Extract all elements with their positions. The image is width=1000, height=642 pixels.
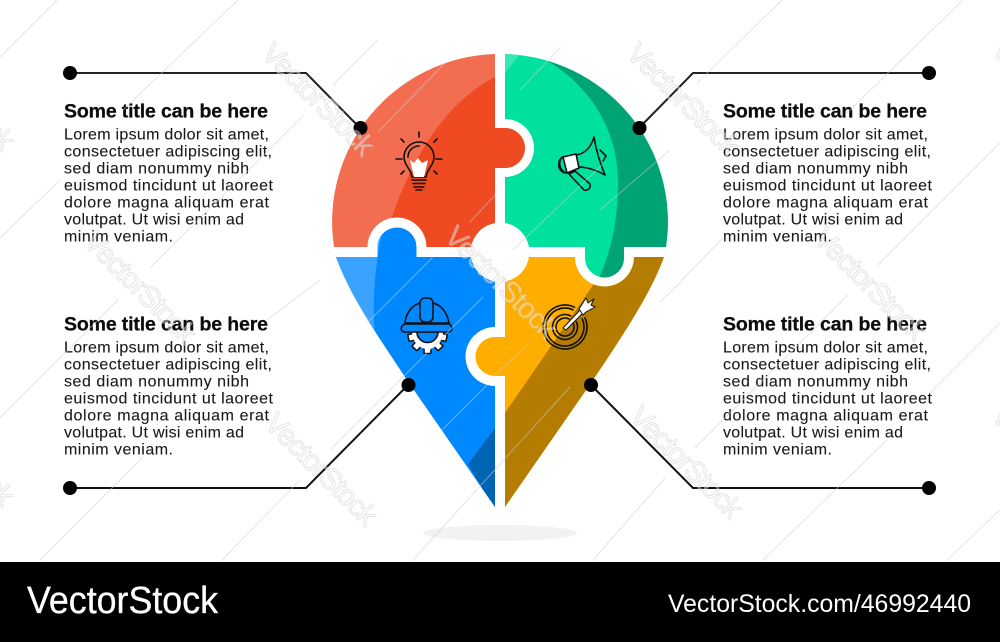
footer logo text: VectorStock: [27, 580, 219, 622]
footer bar: [0, 562, 1000, 642]
text block: bottom right: Lorem ipsum dolor sit amet,: [723, 340, 928, 356]
text block: top right: Some title can be here: [723, 100, 927, 122]
icon: helmet with gear: [401, 298, 452, 354]
text block: bottom right: volutpat. Ut wisi enim ad: [723, 424, 903, 442]
text block: bottom left: Some title can be here: [64, 314, 268, 336]
watermark overlay: VectorStock: [258, 407, 384, 533]
connector: top right: [632, 66, 936, 135]
puzzle pin: [320, 45, 680, 512]
pin shadow: [423, 525, 577, 541]
text block: top left: sed diam nonummy nibh: [64, 160, 249, 178]
text block: bottom right: sed diam nonummy nibh: [723, 374, 908, 390]
text block: bottom left: dolore magna aliquam erat: [64, 408, 270, 424]
text block: bottom left: [64, 314, 274, 458]
text block: top right: dolore magna aliquam erat: [723, 194, 929, 212]
connector: bottom left: [63, 378, 416, 495]
text block: bottom right: [723, 314, 933, 458]
text block: top right: sed diam nonummy nibh: [723, 160, 908, 178]
text block: bottom right: consectetuer adipiscing elit,: [723, 356, 931, 374]
puzzle piece: blue: [336, 228, 495, 507]
text block: top left: minim veniam.: [64, 228, 173, 246]
text block: bottom left: minim veniam.: [64, 442, 173, 458]
text block: bottom left: consectetuer adipiscing elit,: [64, 356, 272, 374]
text block: top left: volutpat. Ut wisi enim ad: [64, 212, 244, 228]
text block: bottom right: dolore magna aliquam erat: [723, 408, 929, 424]
text block: top right: consectetuer adipiscing elit,: [723, 144, 931, 160]
icon: megaphone: [559, 137, 606, 190]
puzzle piece: red: [332, 54, 525, 247]
text block: top left: euismod tincidunt ut laoreet: [64, 178, 274, 194]
watermark overlay: VectorStock: [807, 222, 933, 348]
watermark overlay: VectorStock: [620, 37, 746, 163]
text block: bottom left: Lorem ipsum dolor sit amet,: [64, 340, 269, 356]
text block: top right: Lorem ipsum dolor sit amet,: [723, 126, 928, 144]
text block: top left: consectetuer adipiscing elit,: [64, 144, 272, 160]
text block: top left: Some title can be here: [64, 100, 268, 122]
text block: top right: euismod tincidunt ut laoreet: [723, 178, 933, 194]
watermark overlay: VectorStock: [623, 400, 749, 526]
icon: target with arrow: [536, 298, 595, 356]
text block: bottom left: euismod tincidunt ut laoreet: [64, 390, 274, 408]
text block: bottom left: sed diam nonummy nibh: [64, 374, 249, 390]
puzzle piece: green: [505, 54, 668, 278]
text block: top left: Lorem ipsum dolor sit amet,: [64, 126, 269, 144]
watermark overlay: VectorStock: [438, 220, 564, 346]
text block: bottom right: minim veniam.: [723, 442, 832, 458]
text block: bottom left: volutpat. Ut wisi enim ad: [64, 424, 244, 442]
icon: light bulb: [396, 132, 442, 190]
footer image id: VectorStock.com/46992440: [668, 590, 971, 618]
text block: top right: volutpat. Ut wisi enim ad: [723, 212, 903, 228]
puzzle piece: yellow: [470, 250, 670, 510]
text block: bottom right: Some title can be here: [723, 314, 927, 336]
watermark overlay: VectorStock: [255, 37, 381, 163]
watermark overlay: VectorStock: [77, 225, 203, 351]
text block: top left: dolore magna aliquam erat: [64, 194, 270, 212]
text block: top right: minim veniam.: [723, 228, 832, 246]
text block: bottom right: euismod tincidunt ut laoreet: [723, 390, 933, 408]
text block: top right: [723, 100, 933, 246]
text block: top left: [64, 100, 274, 246]
connector: top left: [63, 66, 368, 135]
connector: bottom right: [584, 378, 936, 495]
